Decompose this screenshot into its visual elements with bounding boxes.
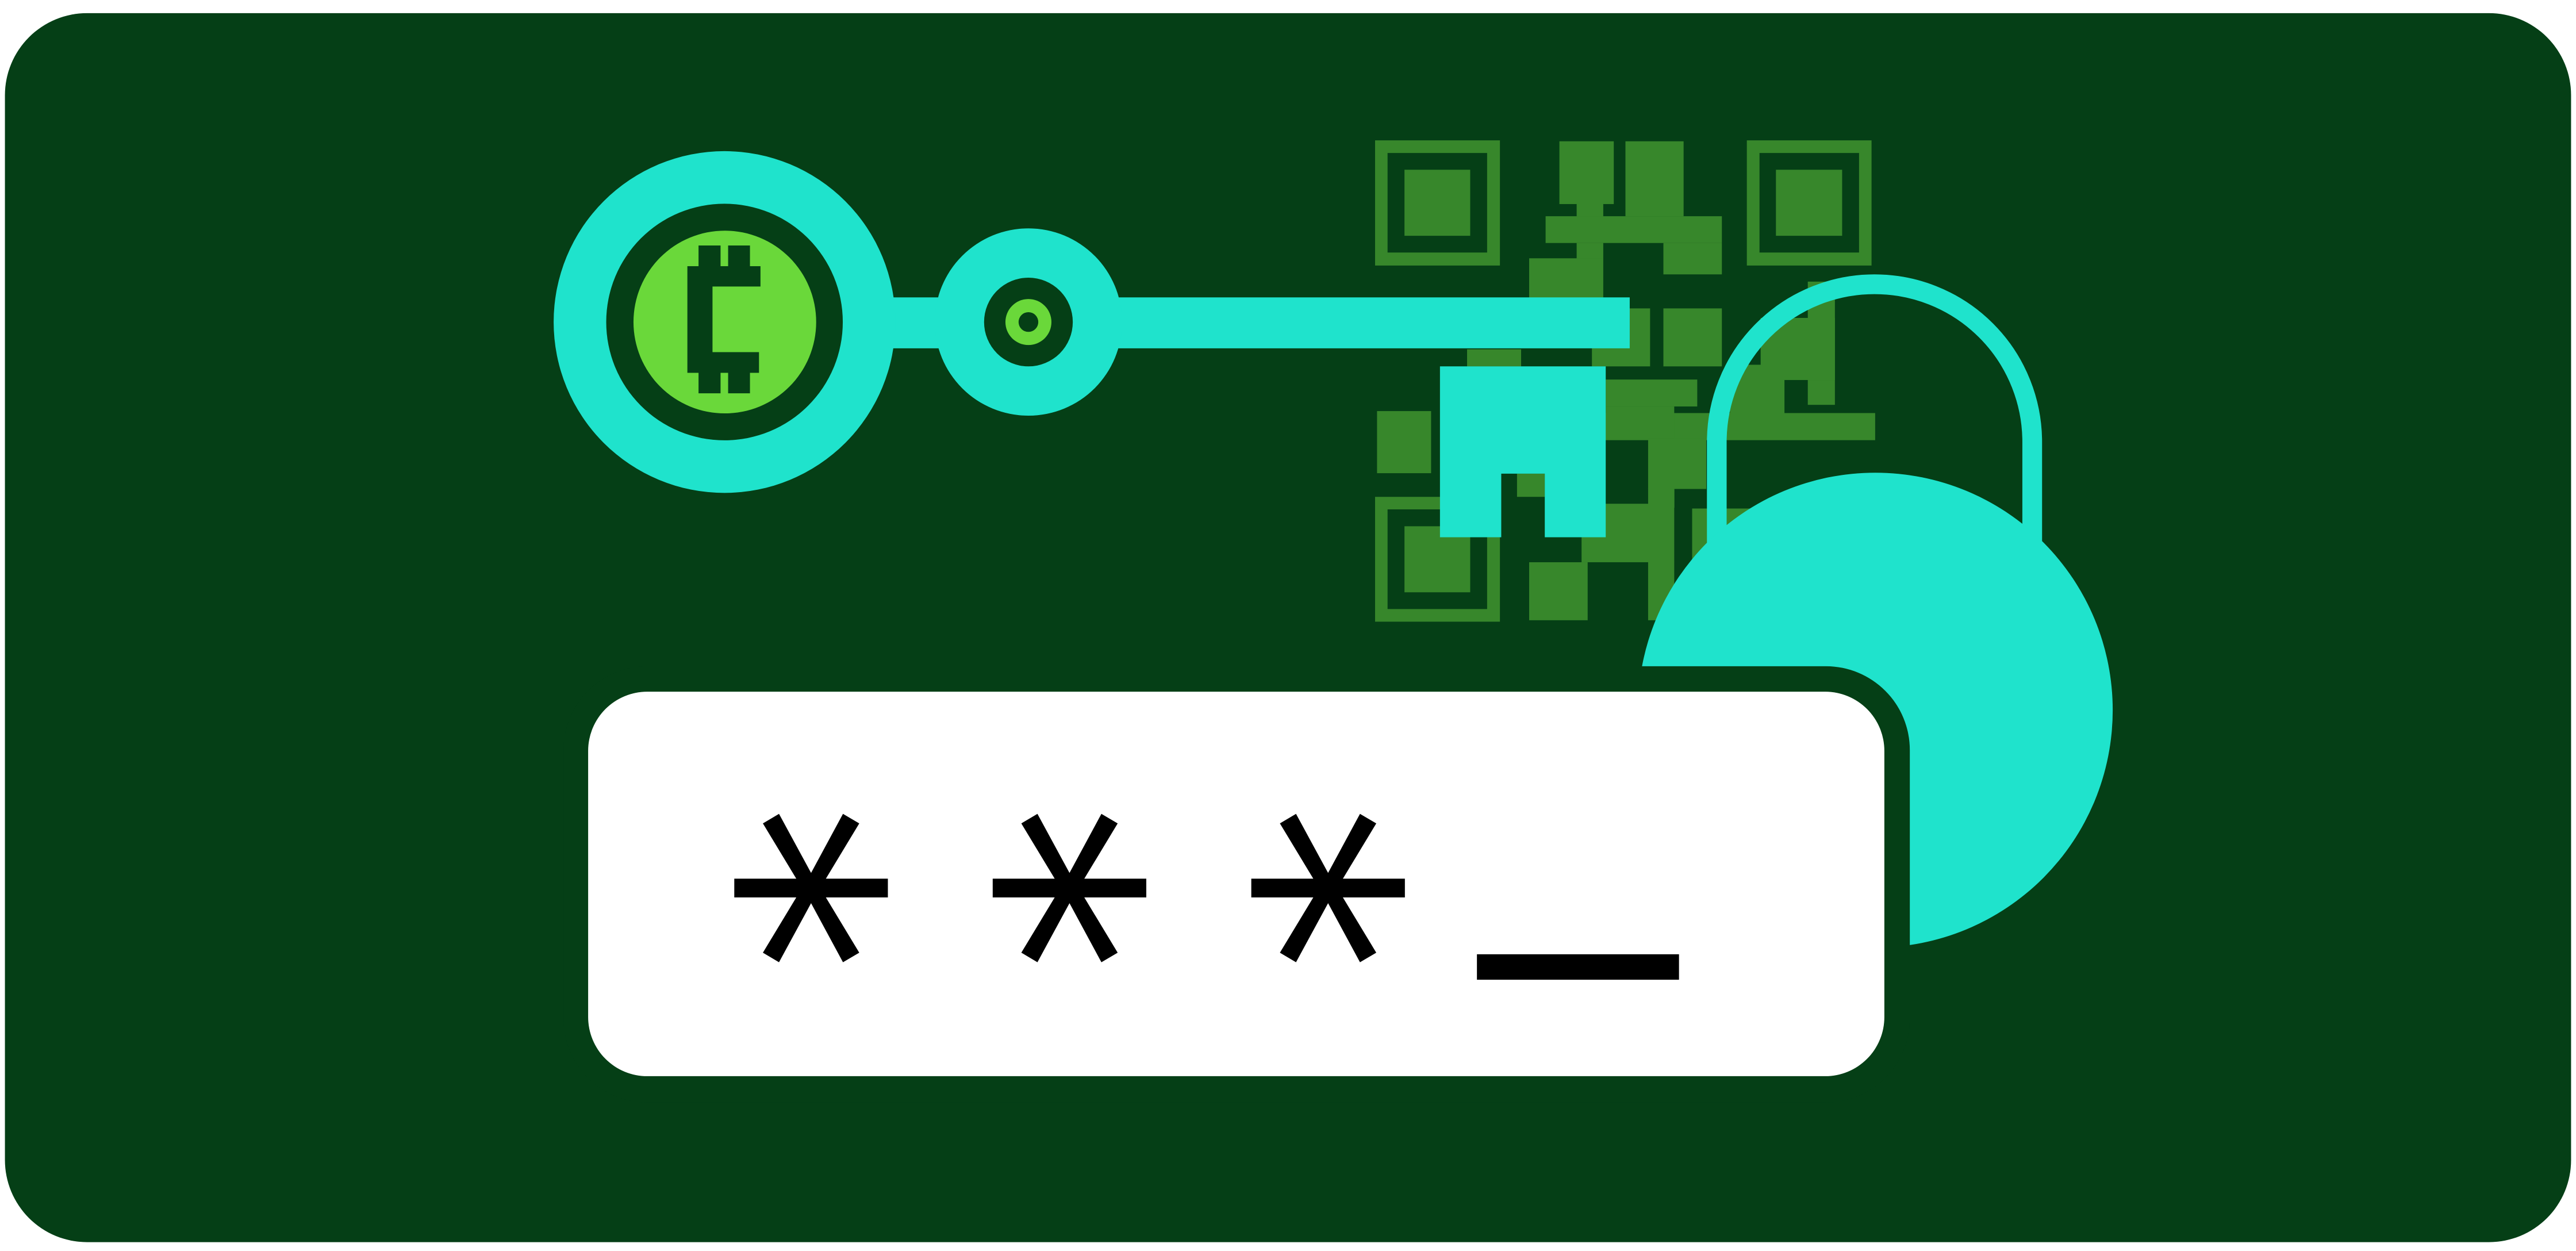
key collar ring <box>935 228 1122 416</box>
key shaft <box>871 297 1630 348</box>
QR code pattern <box>1375 140 1875 621</box>
key <box>554 151 1630 538</box>
QR modules <box>1377 141 1875 621</box>
QR finder: top-right <box>1747 140 1872 266</box>
QR finder: bottom-left <box>1375 497 1500 621</box>
masked password asterisks: * <box>816 804 1208 972</box>
padlock <box>1638 284 2113 947</box>
key tooth <box>1440 366 1606 538</box>
padlock shackle <box>1717 284 2032 723</box>
masked password asterisks <box>558 804 1467 972</box>
cursor underscore <box>1477 954 1679 980</box>
key bow: large ring with bitcoin coin <box>554 151 895 493</box>
masked password asterisks: * <box>1075 804 1467 972</box>
padlock body <box>1638 473 2113 947</box>
masked password asterisks: * <box>558 804 950 972</box>
QR finder: top-left <box>1375 140 1500 266</box>
icon: bitcoin coin <box>634 231 816 413</box>
password field <box>558 666 1910 1103</box>
